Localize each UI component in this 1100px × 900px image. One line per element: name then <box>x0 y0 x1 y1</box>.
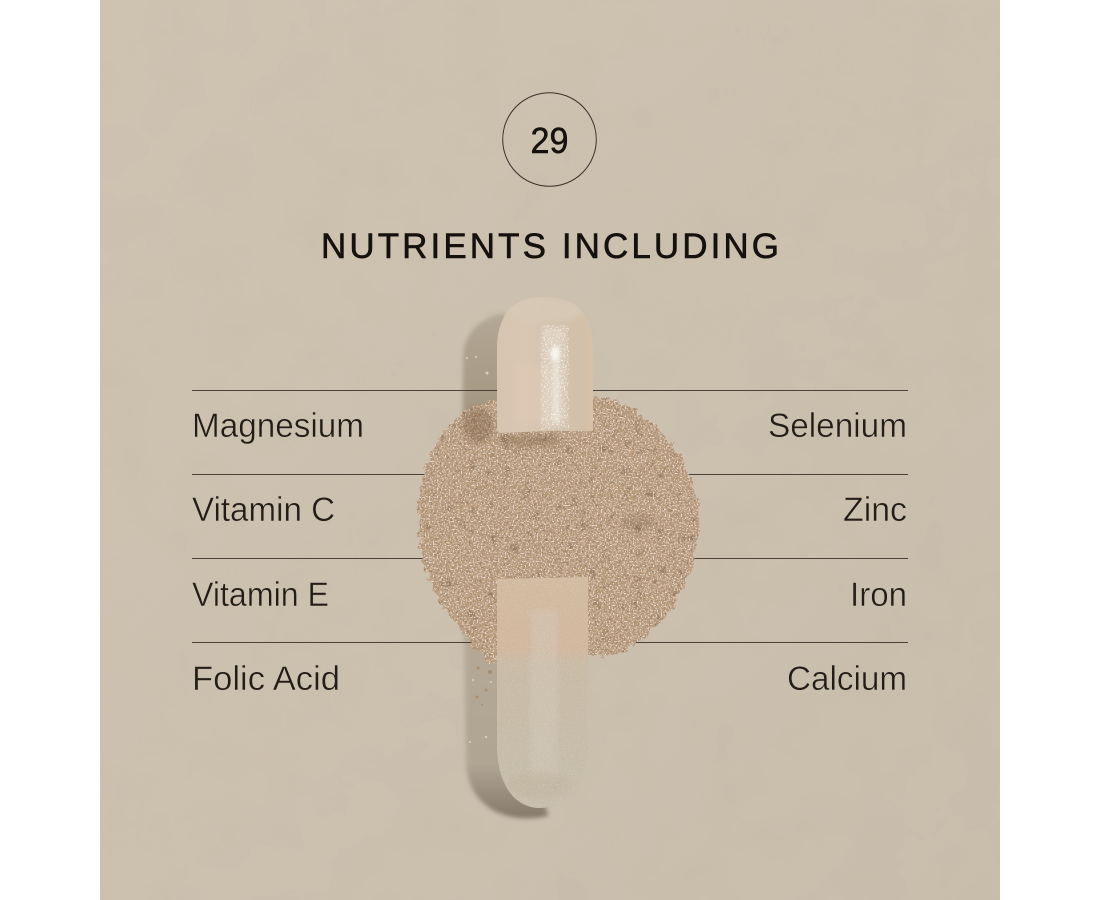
nutrient: Iron: Iron <box>850 576 907 614</box>
powder pile <box>418 394 699 664</box>
capsule: bottom half <box>497 577 588 808</box>
nutrient: Calcium: Calcium <box>787 660 907 698</box>
right nutrient list <box>768 407 907 698</box>
count badge: 29: 29 <box>530 120 568 161</box>
count badge: 29 <box>503 93 596 186</box>
capsule: top half <box>497 297 593 433</box>
divider lines <box>192 390 908 642</box>
title: NUTRIENTS INCLUDING <box>321 227 779 266</box>
nutrient: Folic Acid: Folic Acid <box>192 660 340 698</box>
nutrient: Selenium: Selenium <box>768 407 907 445</box>
capsule shadows <box>463 313 548 818</box>
nutrient: Zinc: Zinc <box>843 491 907 529</box>
nutrient: Vitamin E: Vitamin E <box>192 576 329 614</box>
nutrient: Magnesium: Magnesium <box>192 407 364 445</box>
nutrient: Vitamin C: Vitamin C <box>192 491 335 529</box>
left nutrient list <box>192 407 364 698</box>
